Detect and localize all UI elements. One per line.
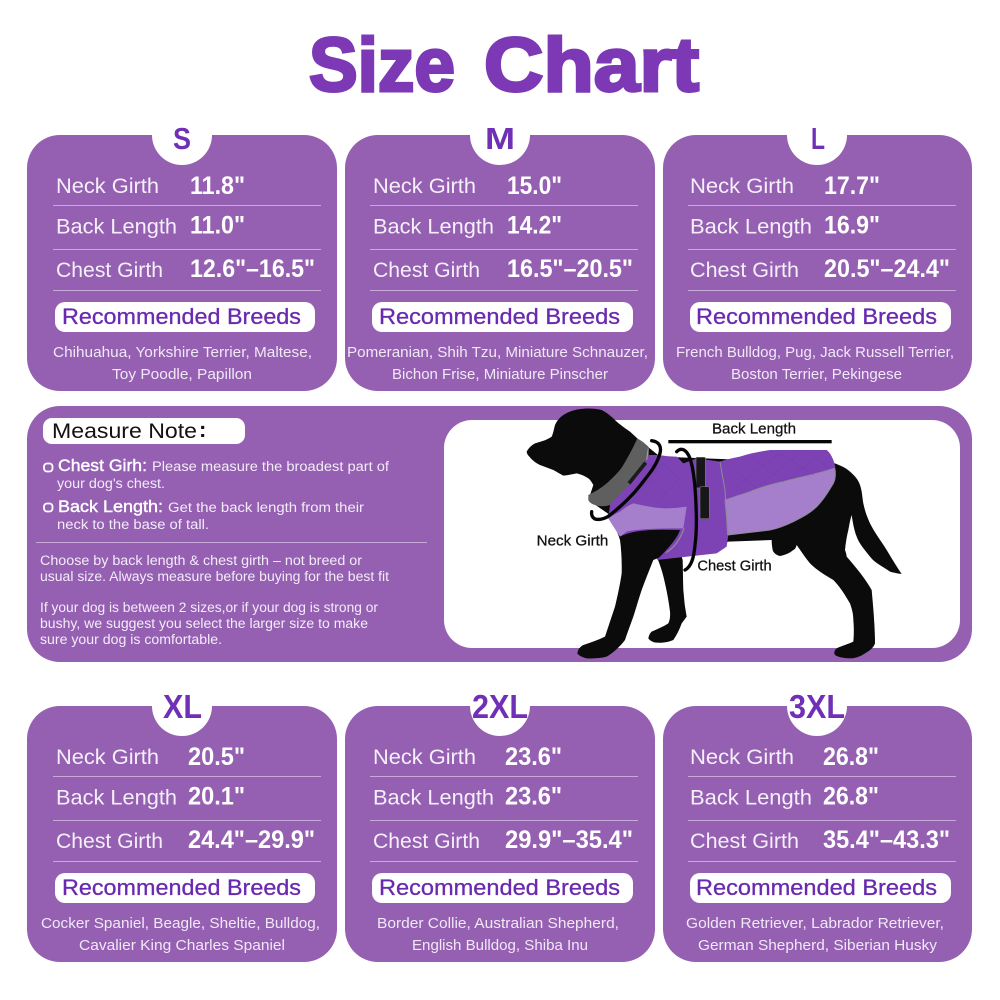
panel: size L: 20.5"–24.4"	[824, 255, 950, 283]
panel: size 3XL: German Shepherd, Siberian Husky	[698, 937, 938, 954]
text block: between sizes advice	[40, 600, 379, 647]
panel: size S: 12.6"–16.5"	[190, 255, 315, 283]
panel: size 2XL: 2XL	[472, 688, 528, 725]
back length line	[668, 440, 832, 443]
panel: size M: Back Length	[373, 216, 494, 238]
panel: size 2XL: Recommended Breeds	[379, 875, 620, 900]
panel: size L: L	[811, 121, 825, 156]
text block: chest girth note: your dog's chest.	[57, 476, 165, 491]
panel: size 3XL: Golden Retriever, Labrador Retriever,	[686, 915, 944, 932]
panel: size S: S	[173, 121, 191, 156]
panel: size XL: Cocker Spaniel, Beagle, Sheltie, Bulldog,	[41, 915, 320, 932]
panel: size 2XL: 23.6"	[505, 782, 562, 810]
panel: size L: Recommended Breeds	[696, 304, 937, 329]
panel: size L: French Bulldog, Pug, Jack Russell Terrier,	[676, 344, 954, 361]
panel: size 2XL: 29.9"–35.4"	[505, 826, 633, 854]
panel: size S: 11.8"	[190, 172, 245, 200]
panel: size S: Recommended Breeds	[62, 304, 301, 329]
panel: size XL: Neck Girth	[56, 746, 159, 769]
panel: size XL: Recommended Breeds	[62, 875, 301, 900]
panel: size M: Recommended Breeds	[379, 304, 620, 329]
panel: size M: Pomeranian, Shih Tzu, Miniature Schnauzer,	[347, 344, 648, 361]
text block: between sizes advice: sure your dog is comfortable.	[40, 632, 222, 647]
panel: size S: Chest Girth	[56, 259, 163, 282]
title: Chart	[484, 23, 699, 108]
panel: size 3XL: 26.8"	[823, 782, 879, 810]
panel: size L	[663, 105, 972, 391]
panel: size L: Boston Terrier, Pekingese	[731, 366, 902, 383]
panel: size L: 16.9"	[824, 212, 880, 240]
text block: chest girth note	[44, 456, 389, 491]
panel: size S: Neck Girth	[56, 175, 159, 198]
panel: size XL: XL	[163, 688, 202, 725]
illustration: dog wearing coat with measure lines	[527, 409, 902, 658]
panel: size 3XL: Neck Girth	[690, 746, 794, 769]
panel: size XL: Chest Girth	[56, 830, 163, 853]
panel: size S: 11.0"	[190, 212, 245, 240]
panel: size XL: 20.1"	[188, 782, 245, 810]
panel: size 3XL: Back Length	[690, 786, 812, 810]
panel: size 2XL: Border Collie, Australian Shepherd,	[377, 915, 619, 932]
neck girth line	[592, 441, 661, 519]
panel: size L: Neck Girth	[690, 175, 794, 198]
panel: size 3XL: Recommended Breeds	[696, 875, 937, 900]
chest girth line	[677, 449, 696, 570]
text block: back length note: Get the back length from their	[168, 500, 365, 515]
panel: size L: 17.7"	[824, 172, 880, 200]
text block: back length note: Back Length:	[58, 497, 163, 516]
panel: measure note	[27, 406, 972, 662]
panel: size S: Toy Poodle, Papillon	[112, 366, 252, 383]
panel: size L: Chest Girth	[690, 259, 799, 282]
panel: size L: Back Length	[690, 216, 812, 238]
panel: size 2XL: Back Length	[373, 786, 494, 810]
fur collar	[588, 438, 649, 506]
panel: size S: Chihuahua, Yorkshire Terrier, Maltese,	[53, 344, 312, 361]
text block: back length note	[44, 497, 365, 532]
panel: size M: 14.2"	[507, 212, 562, 240]
panel: size XL: Back Length	[56, 786, 177, 810]
label: back length: Back Length	[712, 420, 796, 437]
panel: size 2XL	[345, 676, 655, 962]
text block: between sizes advice: If your dog is between 2 sizes,or if your dog is strong or	[40, 600, 379, 615]
heading: measure note: Measure Note	[52, 420, 197, 443]
panel: size 3XL: 3XL	[789, 688, 845, 725]
panel: size XL: Cavalier King Charles Spaniel	[79, 937, 285, 954]
panel: size M: M	[485, 121, 515, 156]
panel: size M: 15.0"	[507, 172, 562, 200]
panel: size 3XL	[663, 676, 972, 962]
panel: size M: Chest Girth	[373, 259, 480, 282]
panel: size XL	[27, 676, 337, 962]
panel: size 3XL: 26.8"	[823, 743, 879, 771]
panel: size 2XL: Chest Girth	[373, 830, 480, 853]
panel: size M: 16.5"–20.5"	[507, 255, 633, 283]
title	[309, 23, 699, 108]
dog silhouette	[527, 409, 902, 658]
dog coat	[608, 450, 836, 560]
text block: choosing advice: usual size. Always measure before buying for the best fit	[40, 569, 389, 584]
panel: size 2XL: 23.6"	[505, 743, 562, 771]
coat straps and buckle	[610, 448, 709, 519]
label: chest girth: Chest Girth	[697, 558, 772, 575]
panel: size M: Neck Girth	[373, 175, 476, 198]
panel: size M	[345, 105, 655, 391]
panel: size M: Bichon Frise, Miniature Pinscher	[392, 366, 608, 383]
panel: size XL: 20.5"	[188, 743, 245, 771]
panel: size 3XL: 35.4"–43.3"	[823, 826, 950, 854]
text block: choosing advice	[40, 553, 389, 584]
panel: size 3XL: Chest Girth	[690, 830, 799, 853]
panel: size 2XL: English Bulldog, Shiba Inu	[412, 937, 588, 954]
label: neck girth: Neck Girth	[537, 533, 608, 550]
text block: chest girth note: Chest Girh:	[58, 456, 147, 475]
text block: between sizes advice: bushy, we suggest you select the larger size to make	[40, 616, 368, 631]
panel: size XL: 24.4"–29.9"	[188, 826, 315, 854]
heading: measure note: :	[199, 417, 206, 442]
text block: choosing advice: Choose by back length & chest girth – not breed or	[40, 553, 363, 568]
text block: chest girth note: Please measure the broadest part of	[152, 459, 389, 474]
heading: measure note	[43, 417, 245, 444]
panel: size 2XL: Neck Girth	[373, 746, 476, 769]
text block: back length note: neck to the base of tall.	[57, 517, 209, 532]
panel: size S	[27, 105, 337, 391]
title: Size	[309, 23, 455, 108]
panel: size S: Back Length	[56, 216, 177, 238]
